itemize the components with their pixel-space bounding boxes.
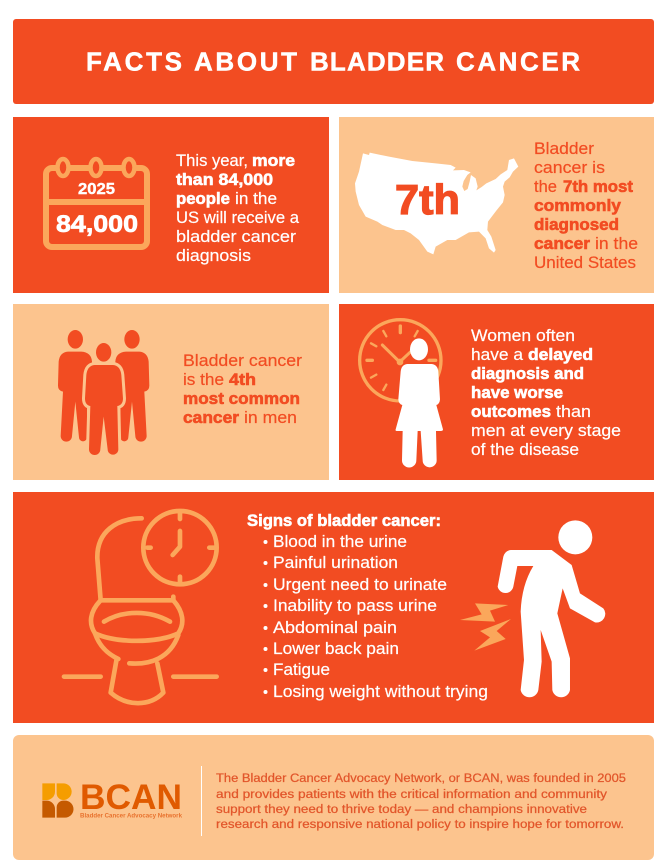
- text: signs list: Blood in the urine: [273, 532, 407, 551]
- logo: BCAN: [42, 778, 182, 820]
- text: BCAN description: and provides patients with the critical information and community: [216, 787, 608, 801]
- text: signs list: Urgent need to urinate: [273, 575, 447, 594]
- icon: calendar: 84,000: [56, 211, 138, 238]
- text: more than 84,000 people: in the: [235, 189, 277, 208]
- text: more than 84,000 people: diagnosis: [176, 246, 251, 265]
- text: signs list: Signs of bladder cancer:: [247, 511, 441, 530]
- text: 4th most common: Bladder cancer: [183, 351, 302, 370]
- logo: BCAN: Bladder Cancer Advocacy Network: [80, 812, 182, 820]
- panel: about BCAN: [13, 735, 654, 860]
- text: signs list: Fatigue: [273, 660, 330, 679]
- text: more than 84,000 people: more: [252, 151, 295, 170]
- icon: calendar: 2025: [78, 181, 115, 198]
- text: delayed diagnosis: than: [556, 402, 591, 421]
- panel: 4th most common in men: [13, 304, 329, 480]
- text: BCAN description: research and responsive national policy to inspire hope for tomorrow.: [216, 817, 624, 831]
- text: 7th most commonly diagnosed: 7th most: [563, 177, 633, 196]
- icon: toilet and clock: [64, 511, 217, 703]
- text: 7th most commonly diagnosed: diagnosed: [534, 215, 619, 234]
- logo: BCAN: BCAN: [80, 778, 182, 817]
- icon: US map with 7th: [355, 153, 518, 254]
- text: 4th most common: 4th: [229, 370, 256, 389]
- text: 7th most commonly diagnosed: [534, 139, 638, 272]
- text: signs list: Inability to pass urine: [273, 596, 437, 615]
- text: signs list: Lower back pain: [273, 639, 399, 658]
- text: 7th most commonly diagnosed: United States: [534, 253, 636, 272]
- heading: facts about bladder cancer: FACTS: [86, 46, 182, 76]
- text: signs list: Abdominal pain: [273, 618, 397, 637]
- text: 7th most commonly diagnosed: Bladder: [534, 139, 594, 158]
- text: BCAN description: [216, 771, 626, 831]
- text: more than 84,000 people: US will receive a: [176, 208, 300, 227]
- text: more than 84,000 people: than 84,000: [176, 170, 273, 189]
- text: delayed diagnosis: Women often: [471, 326, 575, 345]
- icon: woman and clock: [360, 320, 443, 467]
- icon: person with back pain: [460, 520, 605, 697]
- heading: facts about bladder cancer: BLADDER: [310, 46, 444, 76]
- text: delayed diagnosis: diagnosis and: [471, 364, 584, 383]
- icon: calendar: [46, 159, 147, 247]
- text: 4th most common: in men: [244, 408, 297, 427]
- text: 4th most common: [183, 351, 302, 427]
- panel: title banner: [13, 19, 654, 104]
- text: more than 84,000 people: This year,: [176, 151, 248, 170]
- text: more than 84,000 people: bladder cancer: [176, 227, 296, 246]
- panel: 7th most common: [339, 117, 654, 293]
- text: 7th most commonly diagnosed: cancer is: [534, 158, 605, 177]
- text: 4th most common: cancer: [183, 408, 239, 427]
- text: signs list: Painful urination: [273, 553, 398, 572]
- text: 7th most commonly diagnosed: the: [534, 177, 557, 196]
- icon: pain bolts: [460, 603, 511, 651]
- icon: three men: [58, 330, 149, 455]
- text: more than 84,000 people: people: [176, 189, 230, 208]
- heading: facts about bladder cancer: [86, 46, 580, 76]
- panel: signs of bladder cancer: [13, 492, 654, 723]
- panel: 84,000 diagnoses: [13, 117, 329, 293]
- text: delayed diagnosis: [471, 326, 621, 459]
- text: delayed diagnosis: have a: [471, 345, 524, 364]
- heading: facts about bladder cancer: ABOUT: [194, 46, 297, 76]
- text: BCAN description: The Bladder Cancer Advocacy Network, or BCAN, was founded in 2005: [216, 771, 626, 785]
- text: BCAN description: support they need to thrive today — and champions innovative: [216, 802, 587, 816]
- text: delayed diagnosis: men at every stage: [471, 421, 621, 440]
- text: more than 84,000 people: [176, 151, 300, 265]
- heading: facts about bladder cancer: CANCER: [456, 46, 580, 76]
- text: 4th most common: is the: [183, 370, 224, 389]
- text: 7th most commonly diagnosed: commonly: [534, 196, 622, 215]
- text: delayed diagnosis: delayed: [528, 345, 593, 364]
- text: delayed diagnosis: have worse: [471, 383, 563, 402]
- text: delayed diagnosis: outcomes: [471, 402, 551, 421]
- icon: US map with 7th: 7th: [395, 176, 460, 223]
- text: signs list: [247, 511, 488, 701]
- text: 7th most commonly diagnosed: cancer: [534, 234, 590, 253]
- text: 7th most commonly diagnosed: in the: [595, 234, 638, 253]
- text: signs list: Losing weight without trying: [273, 682, 488, 701]
- logo mark: [42, 783, 73, 818]
- panel: women delayed diagnosis: [339, 304, 654, 480]
- text: 4th most common: most common: [183, 389, 300, 408]
- text: delayed diagnosis: of the disease: [471, 440, 579, 459]
